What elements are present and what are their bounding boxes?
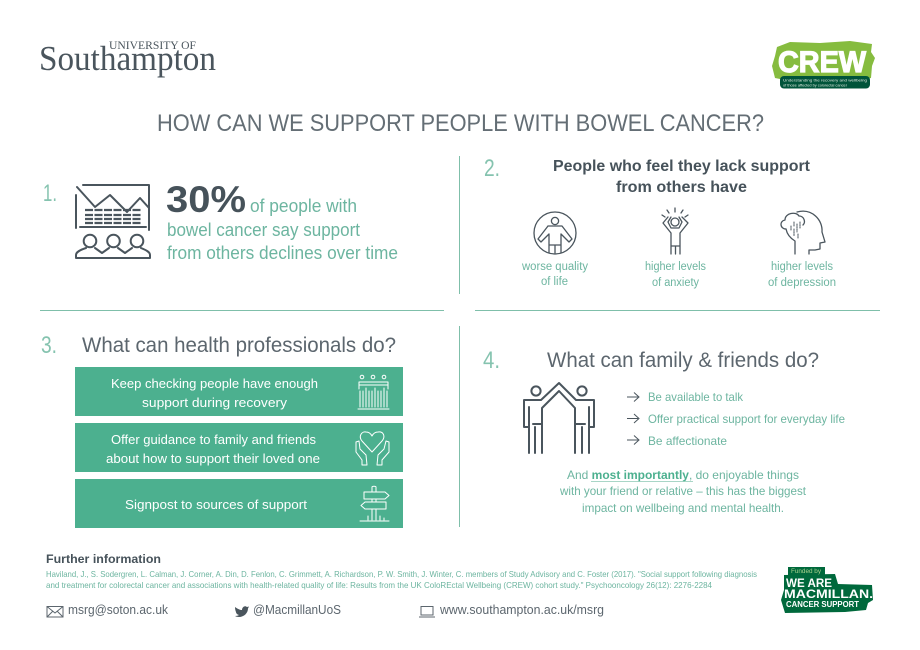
reference: Haviland, J., S. Sodergren, L. Calman, J. Corner, A. Din, D. Fenlon, C. Grimmett, A. Richardson, P. W. Smith, J. Winter, C. members of Study Advisory and C. Foster (2017). "Social support following diagnosis: [46, 570, 757, 579]
heading: [553, 158, 810, 196]
logo: Macmillan: CANCER SUPPORT: [786, 600, 859, 609]
statistic: 30%: 30%: [166, 179, 246, 220]
text: most importantly: And most importantly, do enjoyable things: [567, 468, 799, 482]
panel: 2 lack of support: [484, 155, 836, 289]
logo: Macmillan: MACMILLAN.: [784, 587, 873, 601]
icon: two people high five: [524, 383, 594, 453]
logo: Macmillan: [781, 567, 873, 613]
panel: 1 statistic: [43, 179, 398, 263]
heading: What can health professionals do?: [82, 334, 396, 357]
text: most importantly: with your friend or relative – this has the biggest: [559, 484, 807, 498]
panel: 3 health professionals: [41, 332, 403, 528]
icon labels: higher levels: [645, 261, 706, 273]
icon labels: [521, 261, 836, 289]
icon: signpost: [360, 486, 389, 521]
box: keep checking: [75, 367, 403, 416]
statistic caption: of people with: [250, 196, 357, 216]
logo: CREW: Understanding the recovery and wellbeing: [783, 78, 867, 82]
logo: CREW: CREW: [778, 46, 867, 79]
logo: Macmillan: WE ARE: [786, 576, 832, 590]
icon labels: of depression: [768, 277, 836, 289]
panel: 4 family and friends: [483, 347, 845, 515]
arrows: [627, 392, 639, 444]
further information: [46, 554, 757, 590]
logo: CREW: of those affected by colorectal cancer: [783, 82, 848, 88]
icon: envelope: [47, 606, 63, 617]
text: most importantly: [559, 468, 807, 515]
heading: Further information: [46, 554, 161, 566]
list text: Offer practical support for everyday life: [648, 412, 845, 426]
contact: website: www.southampton.ac.uk/msrg: [439, 602, 604, 617]
logo: Macmillan: Funded by: [791, 569, 821, 575]
icon labels: of life: [541, 276, 568, 288]
box: offer guidance: Offer guidance to family and friends: [111, 432, 316, 447]
number 4: 4.: [483, 347, 500, 374]
heading: People who feel they lack support: [553, 158, 810, 175]
icon: anxious person: [662, 208, 688, 254]
icon: twitter bird: [235, 606, 249, 617]
contact: twitter: @MacmillanUoS: [253, 602, 341, 617]
icon: hands holding heart: [356, 432, 389, 465]
number 1: 1.: [43, 180, 57, 207]
box: signpost: Signpost to sources of support: [125, 497, 307, 512]
number 2: 2.: [484, 155, 500, 182]
list text: Be affectionate: [648, 434, 727, 448]
icon labels: of anxiety: [652, 277, 699, 289]
title: HOW CAN WE SUPPORT PEOPLE WITH BOWEL CANCER?: [157, 110, 764, 137]
logo: University of Southampton: UNIVERSITY OF: [109, 38, 196, 52]
list: ways to help: [627, 390, 845, 448]
reference: and treatment for colorectal cancer and associations with health-related quality of life: Results from the UK ColoREctal Wellbeing (CREW) cohort study." Psychooncology 26(12): 2276-2284: [46, 581, 712, 590]
icon: chart and audience: [76, 185, 150, 258]
icon labels: worse quality: [521, 261, 588, 273]
box: signpost: [75, 479, 403, 528]
contact: email: msrg@soton.ac.uk: [68, 602, 168, 617]
box: offer guidance: [75, 423, 403, 472]
logo: CREW: [772, 41, 875, 88]
heading: What can family & friends do?: [547, 349, 819, 372]
statistic caption: bowel cancer say support: [167, 220, 360, 240]
box: offer guidance: about how to support their loved one: [106, 451, 320, 466]
number 3: 3.: [41, 332, 57, 359]
list text: [648, 390, 845, 448]
icon: person in circle: [534, 212, 576, 254]
icon: group of people: [358, 375, 389, 409]
heading: from others have: [616, 179, 747, 196]
box: keep checking: support during recovery: [142, 395, 288, 410]
logo: University of Southampton: Southampton: [39, 39, 216, 78]
icon labels: higher levels: [771, 261, 833, 273]
dividers: [40, 156, 880, 527]
icon: laptop: [419, 606, 435, 617]
statistic caption: [167, 196, 398, 263]
statistic caption: from others declines over time: [167, 243, 398, 263]
icon: head with rain cloud: [781, 211, 825, 254]
reference: [46, 570, 757, 590]
text: most importantly: impact on wellbeing and mental health.: [582, 501, 784, 515]
list text: Be available to talk: [648, 390, 744, 404]
box: keep checking: Keep checking people have enough: [111, 376, 318, 391]
